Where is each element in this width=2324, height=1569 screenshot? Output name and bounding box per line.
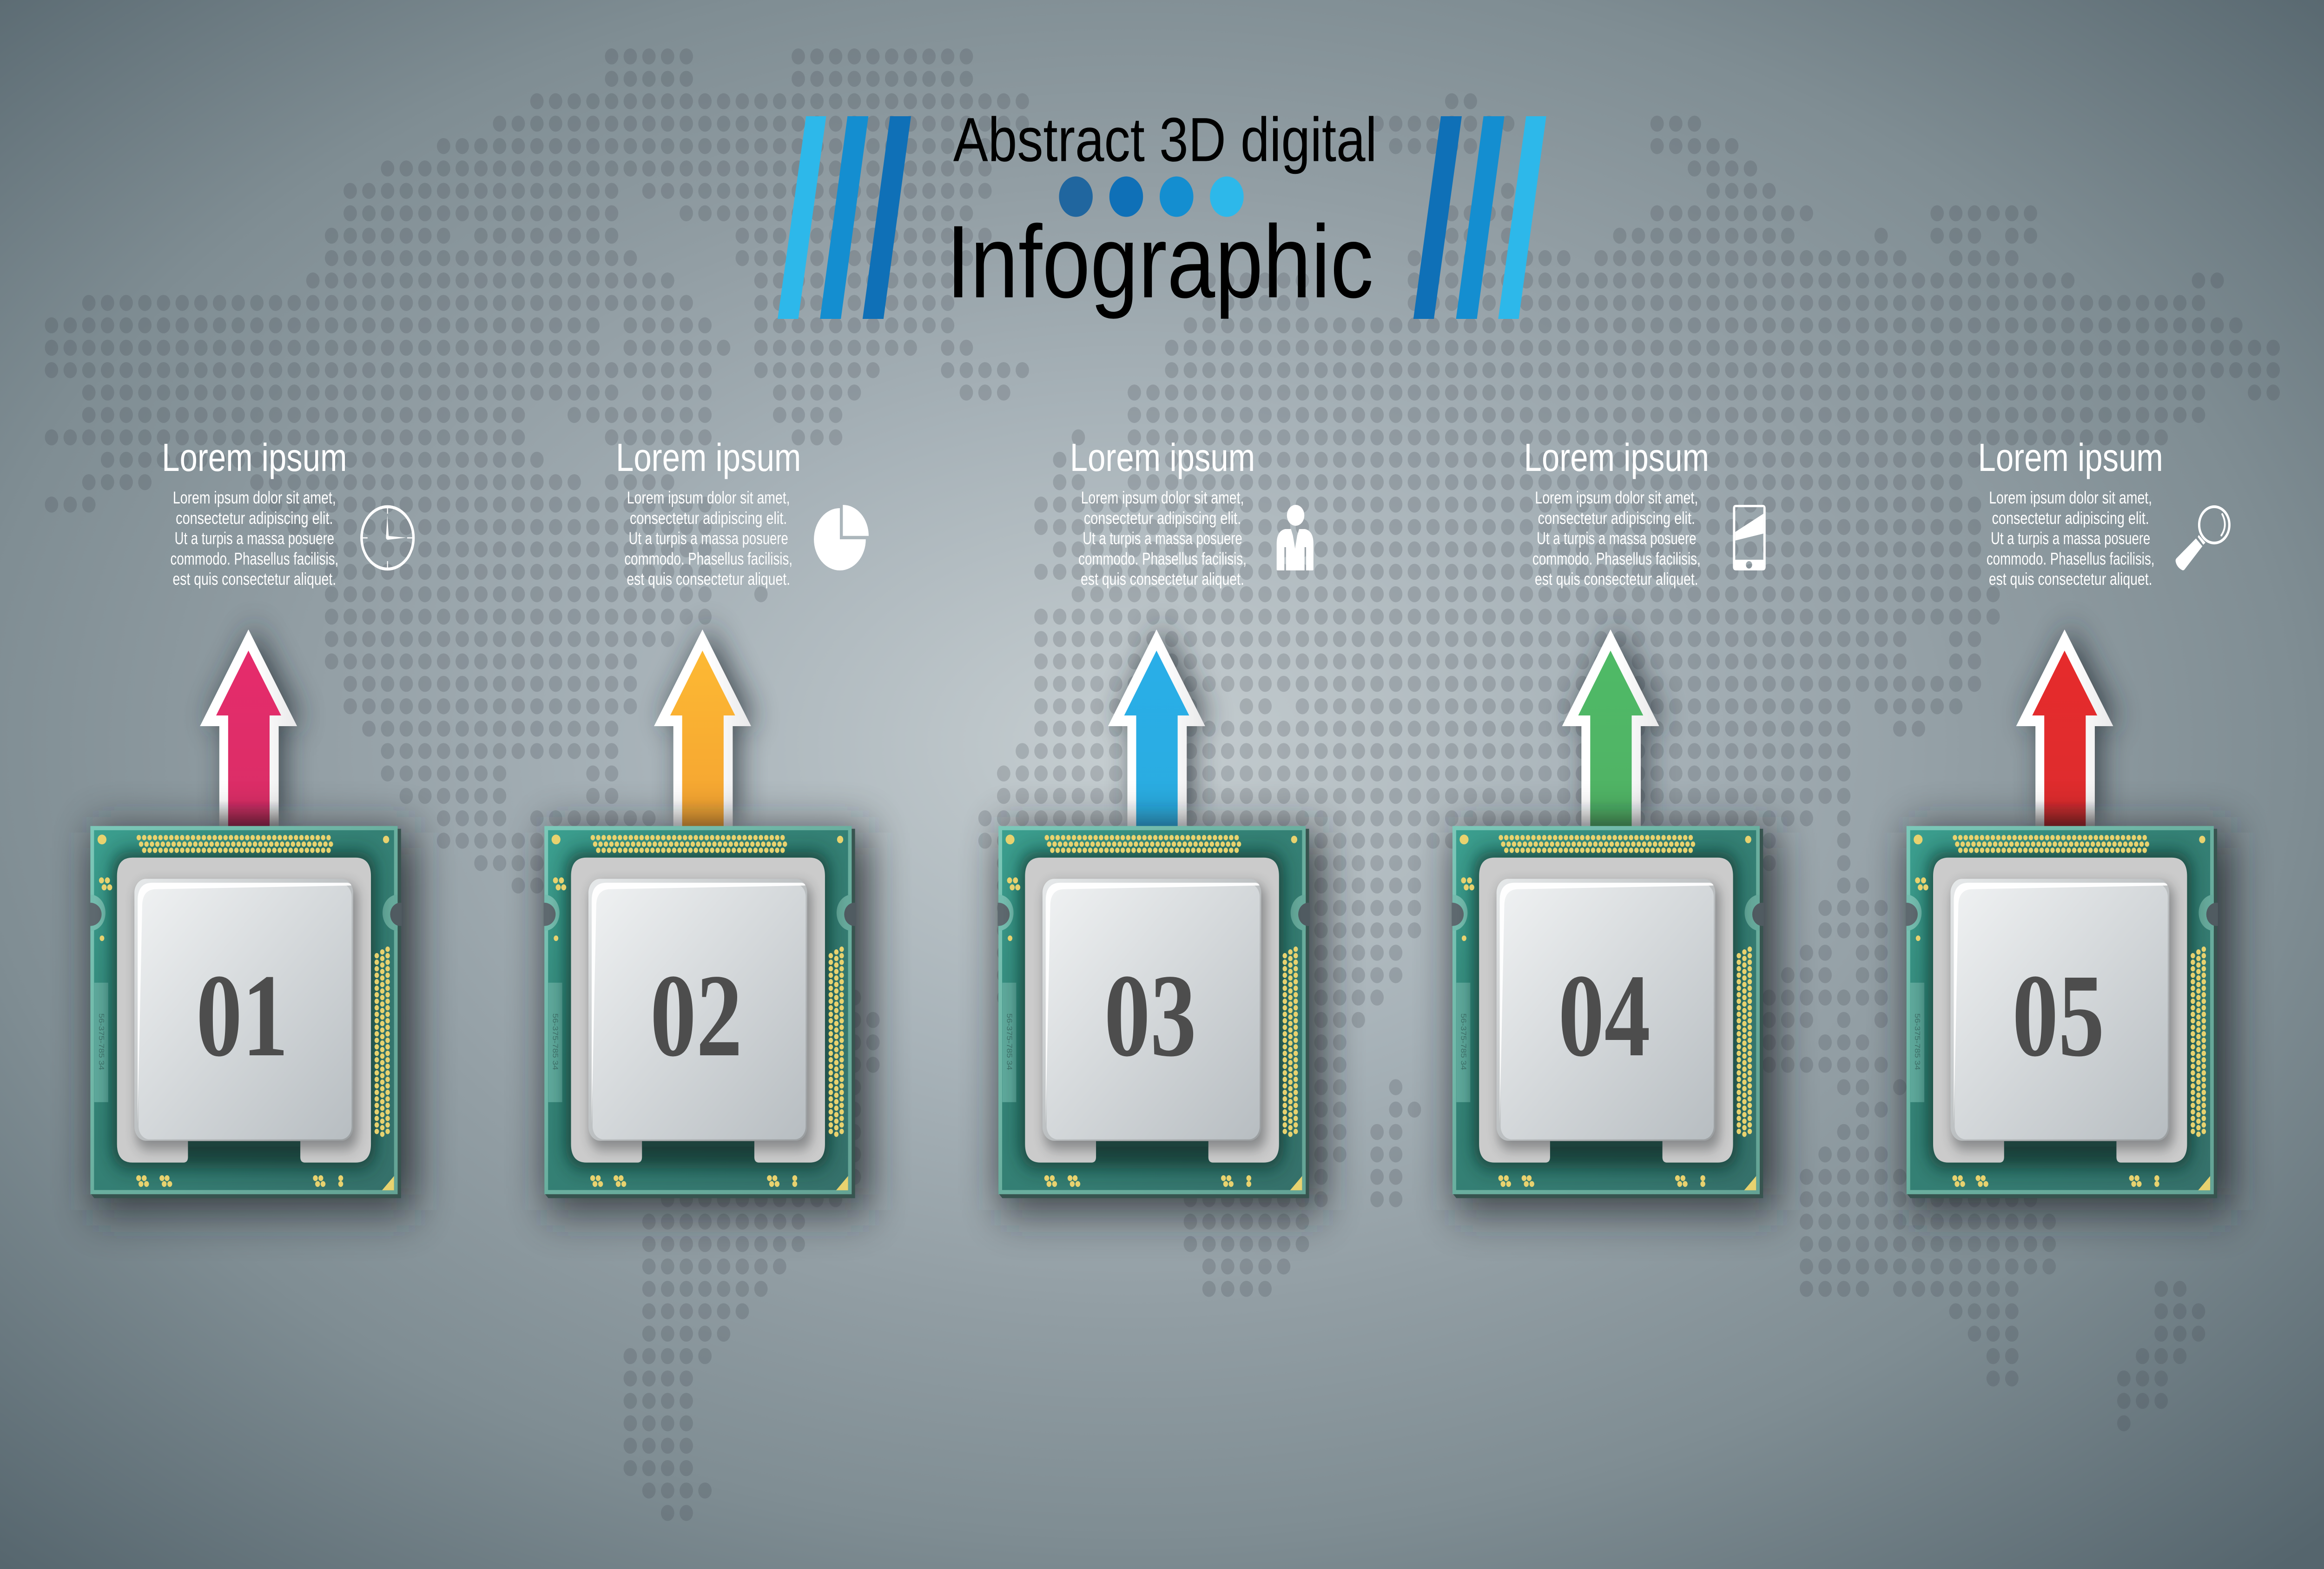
four blue dots: [1059, 177, 1244, 217]
panel: step 04: [1437, 436, 1777, 1210]
text block: [171, 488, 338, 589]
decorative bars: left: [778, 116, 911, 319]
arrow: [1108, 627, 1211, 826]
panel: step 03: [984, 436, 1323, 1210]
text block: consectetur adipiscing elit.: [1992, 509, 2149, 528]
text block: consectetur adipiscing elit.: [176, 509, 333, 528]
number: 05: [2012, 950, 2105, 1081]
text block: [1532, 488, 1701, 589]
title line 1: Abstract 3D digital: [953, 105, 1377, 175]
panel: step 05: [1891, 436, 2231, 1210]
number: 02: [650, 950, 742, 1081]
text block: commodo. Phasellus facilisis,: [171, 549, 338, 569]
text block: commodo. Phasellus facilisis,: [1532, 549, 1701, 569]
text block: [624, 488, 792, 589]
number: 03: [1104, 950, 1196, 1081]
panel: step 02: [529, 436, 869, 1210]
text block: Ut a turpis a massa posuere: [628, 529, 788, 548]
text block: consectetur adipiscing elit.: [1084, 509, 1241, 528]
arrow: [654, 627, 757, 826]
text block: Ut a turpis a massa posuere: [1083, 529, 1242, 548]
chip: [1891, 826, 2231, 1210]
arrow: [200, 627, 303, 826]
text block: Lorem ipsum dolor sit amet,: [1535, 488, 1698, 508]
heading: Lorem ipsum: [1070, 436, 1255, 479]
number: 04: [1558, 950, 1651, 1081]
title block: [778, 105, 1546, 319]
serial number: 56-375-785 34: [551, 1013, 560, 1070]
text block: Ut a turpis a massa posuere: [175, 529, 334, 548]
text block: est quis consectetur aliquet.: [1081, 569, 1244, 589]
heading: Lorem ipsum: [1524, 436, 1709, 479]
text block: est quis consectetur aliquet.: [1535, 569, 1698, 589]
chip: [75, 826, 415, 1210]
text block: consectetur adipiscing elit.: [630, 509, 787, 528]
text block: Lorem ipsum dolor sit amet,: [1081, 488, 1244, 508]
chip: [1437, 826, 1777, 1210]
title line 2: Infographic: [946, 205, 1373, 319]
text block: est quis consectetur aliquet.: [173, 569, 336, 589]
icon: smartphone: [1733, 505, 1766, 570]
text block: commodo. Phasellus facilisis,: [1078, 549, 1247, 569]
serial number: 56-375-785 34: [1459, 1013, 1468, 1070]
text block: Lorem ipsum dolor sit amet,: [173, 488, 336, 508]
icon: person: [1277, 505, 1314, 570]
serial number: 56-375-785 34: [1005, 1013, 1014, 1070]
text block: est quis consectetur aliquet.: [1989, 569, 2152, 589]
text block: Ut a turpis a massa posuere: [1537, 529, 1696, 548]
heading: Lorem ipsum: [616, 436, 801, 479]
heading: Lorem ipsum: [1978, 436, 2163, 479]
serial number: 56-375-785 34: [97, 1013, 106, 1070]
icon: pie chart: [814, 505, 869, 570]
chip: [984, 826, 1323, 1210]
panel: step 01: [75, 436, 415, 1210]
text block: [1987, 488, 2155, 589]
arrow: [1562, 627, 1665, 826]
text block: Ut a turpis a massa posuere: [1991, 529, 2150, 548]
heading: Lorem ipsum: [162, 436, 347, 479]
icon: magnifier: [2176, 507, 2229, 570]
text block: commodo. Phasellus facilisis,: [624, 549, 792, 569]
text block: est quis consectetur aliquet.: [627, 569, 790, 589]
decorative bars: right: [1413, 116, 1546, 319]
icon: clock: [362, 507, 414, 569]
text block: [1078, 488, 1247, 589]
text block: Lorem ipsum dolor sit amet,: [627, 488, 790, 508]
chip: [529, 826, 869, 1210]
number: 01: [196, 950, 288, 1081]
serial number: 56-375-785 34: [1913, 1013, 1922, 1070]
arrow: [2016, 627, 2119, 826]
text block: commodo. Phasellus facilisis,: [1987, 549, 2155, 569]
text block: consectetur adipiscing elit.: [1538, 509, 1695, 528]
text block: Lorem ipsum dolor sit amet,: [1989, 488, 2152, 508]
